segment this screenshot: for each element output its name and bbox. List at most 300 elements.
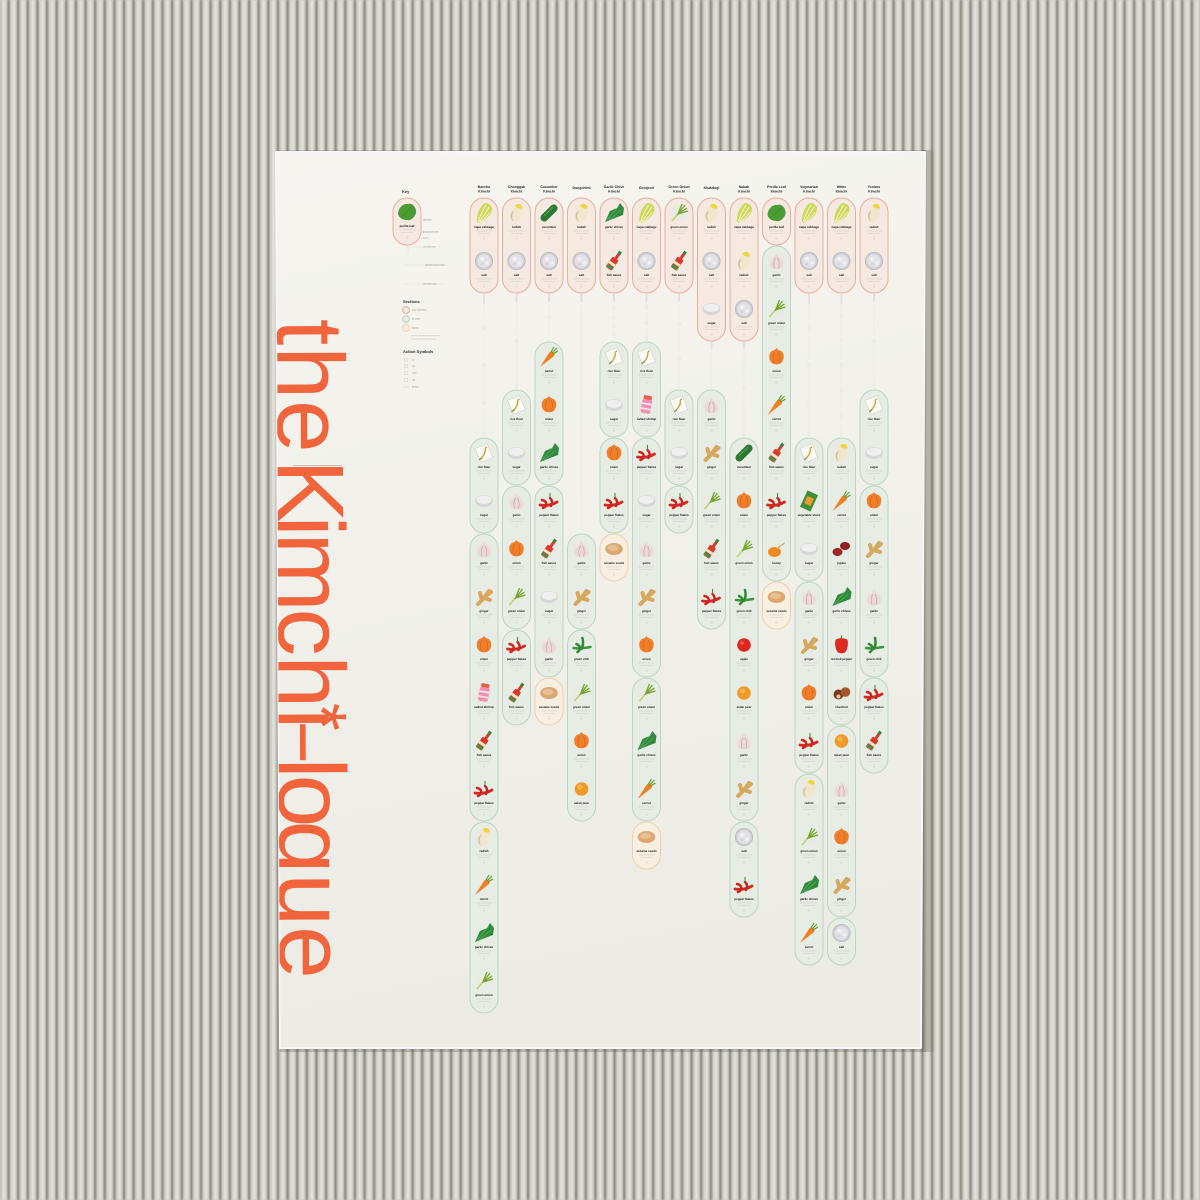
pill: flour paste (665, 390, 693, 485)
salt: salt (709, 273, 714, 277)
garlic: garlic (772, 273, 781, 277)
pepper flakes (767, 493, 787, 527)
key callout labels: preparation notes (423, 231, 439, 234)
heading: Nabak (739, 185, 749, 189)
heading: Perilla Leaf (767, 185, 786, 189)
sections heading: Sections (403, 299, 420, 304)
cucumber (734, 443, 754, 479)
garlic: garlic (805, 609, 813, 613)
garlic chives (637, 731, 656, 767)
onion: onion (837, 849, 846, 853)
green onion (508, 588, 526, 623)
sesame seeds: sesame seeds (636, 849, 657, 853)
onion (866, 492, 882, 527)
carrot (832, 491, 850, 527)
rice flour: rice flour (673, 417, 686, 421)
carrot: carrot (642, 801, 651, 805)
heading: Kimchi (608, 190, 620, 194)
asian pear: asian pear (834, 753, 850, 757)
sesame seeds: sesame seeds (604, 561, 625, 565)
fish sauce (476, 730, 494, 767)
heading: Kimchi (478, 190, 490, 194)
asian pear (834, 734, 850, 767)
key heading: Key (402, 189, 410, 194)
garlic (508, 492, 525, 527)
column: Nabak Kimchi (730, 185, 758, 917)
pill: seasoning (730, 822, 758, 917)
garlic chives: garlic chives (475, 945, 493, 949)
sections legend: the paste (412, 318, 421, 321)
asian pear: asian pear (574, 801, 590, 805)
asian pear (736, 686, 752, 719)
rice flour: rice flour (608, 369, 621, 373)
action symbols legend: mix (412, 365, 415, 368)
onion: onion (805, 705, 813, 709)
heading: Kimchi (868, 190, 880, 194)
salt: salt (741, 321, 747, 325)
pill: main ingredients (600, 198, 628, 293)
rice flour: rice flour (640, 369, 654, 373)
carrot (540, 347, 558, 383)
onion (476, 636, 492, 671)
pill: flour paste (860, 390, 888, 485)
rice flour: rice flour (803, 465, 816, 469)
garlic: garlic (577, 561, 586, 565)
radish: radish (869, 225, 879, 229)
connector (872, 293, 876, 390)
carrot: carrot (837, 513, 846, 517)
connector (548, 293, 550, 342)
heading: Baechu (478, 185, 490, 189)
garlic (736, 732, 752, 767)
sugar: sugar (675, 465, 684, 469)
column: Perilla Leaf Kimchi (762, 185, 790, 629)
pepper flakes: pepper flakes (637, 465, 657, 469)
sesame seeds: sesame seeds (766, 609, 787, 613)
action symbols heading: Action Symbols (403, 349, 434, 354)
pepper flakes: pepper flakes (604, 513, 624, 517)
vegetable stock (798, 490, 821, 527)
heading: Kimchi (836, 190, 847, 194)
green onion: green onion (508, 609, 525, 613)
pill: seasoning (665, 486, 693, 533)
napa cabbage: napa cabbage (636, 225, 657, 229)
pill: flour paste (470, 438, 498, 533)
red bell pepper: red bell pepper (831, 657, 853, 661)
connector (580, 293, 582, 534)
pill: main ingredients (502, 198, 530, 293)
pill: seasoning (600, 438, 628, 533)
napa cabbage: napa cabbage (474, 225, 494, 229)
honey: honey (772, 561, 781, 565)
ginger: ginger (804, 657, 814, 661)
garlic (768, 252, 785, 287)
title (276, 320, 348, 975)
sections legend: topping (412, 327, 419, 330)
heading: Dongchimi (572, 186, 591, 190)
fish sauce: fish sauce (542, 561, 557, 565)
pill: aromatics (828, 726, 856, 917)
pill: aromatics (860, 486, 888, 677)
ginger: ginger (837, 897, 847, 901)
onion (574, 732, 590, 767)
sugar (540, 591, 558, 623)
onion: onion (642, 657, 651, 661)
pill: seasoning (860, 678, 888, 773)
garlic (866, 588, 882, 623)
green onion: green onion (638, 705, 655, 709)
pepper flakes: pepper flakes (799, 753, 819, 757)
onion (768, 348, 784, 383)
column: Geotjeori (632, 186, 660, 869)
pill: seasoning (698, 390, 726, 629)
garlic chives: garlic chives (800, 897, 818, 901)
connector (515, 293, 518, 390)
green onion: green onion (800, 849, 818, 853)
jujube: jujube (836, 561, 846, 565)
carrot (475, 875, 493, 911)
garlic chives (475, 923, 494, 959)
chestnut: chestnut (835, 705, 848, 709)
salt: salt (644, 273, 649, 277)
sesame seeds: sesame seeds (539, 705, 560, 709)
onion: onion (480, 657, 488, 661)
onion (834, 828, 850, 863)
pepper flakes (474, 781, 494, 815)
heading: Kimchi (543, 190, 555, 194)
garlic (800, 588, 818, 623)
ginger (801, 639, 817, 671)
column: Cucumber Kimchi (535, 185, 563, 725)
vegetable stock: vegetable stock (798, 513, 821, 517)
fish sauce: fish sauce (769, 465, 784, 469)
pill: seasoning (828, 918, 856, 965)
garlic chives (832, 587, 852, 623)
heading: Geotjeori (639, 186, 654, 190)
fish sauce: fish sauce (672, 273, 687, 277)
green onion: green onion (703, 513, 720, 517)
fish sauce (768, 442, 786, 479)
connector (482, 293, 486, 438)
pill: seasoning (762, 246, 790, 581)
column: Green Onion Kimchi (665, 185, 693, 533)
napa cabbage: napa cabbage (831, 225, 852, 229)
pepper flakes (702, 589, 722, 623)
sections legend: main ingredients (412, 309, 427, 312)
onion: onion (512, 561, 521, 565)
fish sauce: fish sauce (867, 753, 882, 757)
ginger (866, 543, 882, 575)
column: Dongchimi (568, 186, 596, 821)
pill: main ingredient (762, 198, 790, 245)
garlic chives: garlic chives (540, 465, 558, 469)
pill: topping (535, 678, 563, 725)
pill: flour paste (600, 342, 628, 437)
pill: seasoning (535, 486, 563, 677)
carrot: carrot (805, 945, 813, 949)
pepper flakes: pepper flakes (702, 609, 722, 613)
salted shrimp: salted shrimp (637, 417, 656, 421)
pepper flakes: pepper flakes (669, 513, 689, 517)
garlic (703, 396, 720, 431)
action symbols legend: salt (412, 379, 416, 382)
heading: Kimchi (803, 190, 815, 194)
ginger: ginger (869, 561, 879, 565)
garlic (476, 540, 492, 575)
poster shadow (276, 150, 936, 1052)
heading: Kkakdugi (704, 186, 719, 190)
ginger: ginger (479, 609, 489, 613)
connector (645, 293, 648, 342)
ginger (638, 591, 654, 623)
pill: vegetables (632, 678, 660, 821)
key callout labels: ingredient group edge (425, 264, 445, 267)
salt: salt (839, 945, 844, 949)
sugar: sugar (707, 321, 716, 325)
fish sauce: fish sauce (704, 561, 719, 565)
garlic chives (800, 875, 819, 911)
salt (735, 300, 753, 335)
column: Kkakdugi (698, 186, 726, 629)
cucumber: cucumber (542, 225, 557, 229)
column: Chonggak Kimchi (502, 185, 530, 725)
garlic chives: garlic chives (637, 753, 656, 757)
carrot: carrot (545, 369, 553, 373)
napa cabbage: napa cabbage (799, 225, 819, 229)
pill: seasoning (470, 534, 498, 821)
green onion (735, 540, 753, 575)
heading: White (837, 185, 846, 189)
title rule (293, 464, 342, 467)
salted shrimp (474, 683, 494, 719)
key callout labels: ingredient (423, 219, 432, 222)
column: Vegetarian Kimchi (795, 185, 823, 965)
title: the Kimchı (256, 319, 364, 732)
key pill (393, 198, 421, 245)
carrot: carrot (480, 897, 488, 901)
pill: vegetables (795, 774, 823, 965)
sugar (800, 543, 818, 575)
radish (475, 826, 493, 863)
garlic chives: garlic chives (832, 609, 851, 613)
salted shrimp: salted shrimp (474, 705, 494, 709)
pill: vegetables (568, 630, 596, 821)
ginger (736, 783, 752, 815)
fish sauce: fish sauce (509, 705, 524, 709)
action symbols legend: cut (412, 359, 415, 362)
fish sauce: fish sauce (607, 273, 622, 277)
fish sauce: fish sauce (477, 753, 492, 757)
honey (768, 543, 784, 575)
onion (801, 684, 817, 719)
ginger (834, 879, 850, 911)
carrot (638, 779, 656, 815)
pill: seasoning (632, 438, 660, 677)
pepper flakes: pepper flakes (507, 657, 527, 661)
garlic chives (540, 443, 559, 479)
heading: Yeolmu (868, 185, 880, 189)
heading: Kimchi (771, 190, 782, 194)
pepper flakes: pepper flakes (864, 705, 884, 709)
apple: apple (740, 657, 748, 661)
garlic chives: garlic chives (605, 225, 623, 229)
garlic (638, 540, 655, 575)
key panel (393, 189, 447, 389)
pill: vegetables (470, 822, 498, 1013)
salt (703, 252, 720, 287)
pill: aromatics (568, 534, 596, 629)
pepper flakes: pepper flakes (474, 801, 494, 805)
pill: topping (632, 822, 660, 869)
pill: main ingredients (568, 198, 596, 293)
pill: topping (762, 582, 790, 629)
jujube (832, 542, 850, 575)
radish (800, 778, 818, 815)
connector (710, 341, 712, 390)
salt: salt (741, 849, 747, 853)
onion (736, 492, 752, 527)
sugar: sugar (870, 465, 879, 469)
onion (508, 540, 524, 575)
sugar: sugar (545, 609, 554, 613)
key callouts (405, 220, 447, 284)
ginger (476, 591, 492, 623)
green onion (573, 684, 590, 719)
pepper flakes: pepper flakes (767, 513, 787, 517)
sugar (703, 303, 720, 335)
garlic (540, 636, 558, 671)
onion: onion (740, 513, 748, 517)
rice flour: rice flour (478, 465, 491, 469)
title: logue (258, 757, 364, 979)
radish: radish (512, 225, 521, 229)
pill: main ingredients (698, 198, 726, 341)
radish: radish (707, 225, 716, 229)
radish: radish (739, 273, 749, 277)
column: Baechu Kimchi (470, 185, 498, 1013)
carrot (768, 395, 786, 431)
garlic: garlic (545, 657, 553, 661)
pill: vegetables (535, 342, 563, 485)
pill: main ingredients (795, 198, 823, 293)
key callout labels: action (423, 237, 428, 240)
heading: Kimchi (673, 190, 685, 194)
garlic: garlic (837, 801, 846, 805)
green onion (768, 300, 786, 335)
pill: main ingredients (860, 198, 888, 293)
pill: main ingredients (535, 198, 563, 293)
onion: onion (577, 753, 586, 757)
chestnut (834, 687, 850, 719)
green onion: green onion (735, 561, 753, 565)
green onion: green onion (670, 225, 688, 229)
pill: seasoning (795, 582, 823, 773)
onion: onion (610, 465, 618, 469)
key callout labels (423, 219, 445, 286)
onion: onion (772, 369, 781, 373)
green chili: green chili (574, 657, 589, 661)
column: Garlic Chive Kimchi (600, 185, 628, 581)
heading: Kimchi (738, 190, 750, 194)
green onion (800, 828, 818, 863)
heading: Kimchi (511, 190, 522, 194)
key callout labels: connector point (423, 283, 437, 286)
garlic: garlic (642, 561, 651, 565)
heading: Chonggak (508, 185, 525, 189)
poster sheet (276, 152, 925, 1048)
pill: flour paste (632, 342, 660, 437)
cucumber: cucumber (737, 465, 752, 469)
garlic (833, 780, 850, 815)
garlic: garlic (870, 609, 878, 613)
column: White Kimchi (828, 185, 856, 965)
onion: onion (545, 417, 553, 421)
connector (840, 293, 843, 438)
radish: radish (577, 225, 586, 229)
onion (638, 636, 654, 671)
key pill: perilla leaf (400, 224, 414, 228)
pepper flakes: pepper flakes (539, 513, 559, 517)
asian pear: asian pear (737, 705, 752, 709)
radish: radish (837, 465, 846, 469)
connector (612, 293, 616, 342)
pepper flakes (539, 493, 559, 527)
key callout labels: connector line (423, 246, 436, 249)
pill: seasoning (502, 630, 530, 725)
sugar: sugar (610, 417, 619, 421)
garlic: garlic (707, 417, 716, 421)
salt: salt (871, 273, 877, 277)
napa cabbage (734, 203, 754, 239)
connector (678, 293, 680, 390)
radish: radish (804, 801, 814, 805)
fish sauce (703, 538, 721, 575)
pill: topping (600, 534, 628, 581)
pepper flakes: pepper flakes (734, 897, 754, 901)
connector (742, 341, 746, 438)
carrot (800, 923, 818, 959)
pill: main ingredients (665, 198, 693, 293)
onion (541, 396, 557, 431)
pill: flour paste (795, 438, 823, 581)
pill: main ingredients (730, 198, 758, 341)
sections legend (403, 307, 440, 339)
sugar: sugar (805, 561, 814, 565)
perilla leaf: perilla leaf (769, 225, 784, 229)
napa cabbage: napa cabbage (734, 225, 754, 229)
column: Yeolmu Kimchi (860, 185, 888, 773)
title: * (280, 703, 361, 731)
rice flour: rice flour (868, 417, 881, 421)
sugar: sugar (512, 465, 521, 469)
garlic: garlic (740, 753, 748, 757)
green chili (736, 590, 753, 623)
action symbols legend: wash (412, 372, 417, 375)
radish (703, 202, 720, 239)
pill: vegetables and fruit (730, 438, 758, 821)
heading: Green Onion (668, 185, 690, 189)
pepper flakes (637, 445, 657, 479)
radish (833, 442, 850, 479)
heading: Cucumber (540, 185, 558, 189)
green onion (703, 492, 720, 527)
asian pear (574, 782, 590, 815)
heading: Garlic Chive (604, 185, 624, 189)
pepper flakes (799, 733, 819, 767)
pill: aromatics (502, 486, 530, 629)
pill: vegetables (828, 438, 856, 725)
salt: salt (579, 273, 584, 277)
